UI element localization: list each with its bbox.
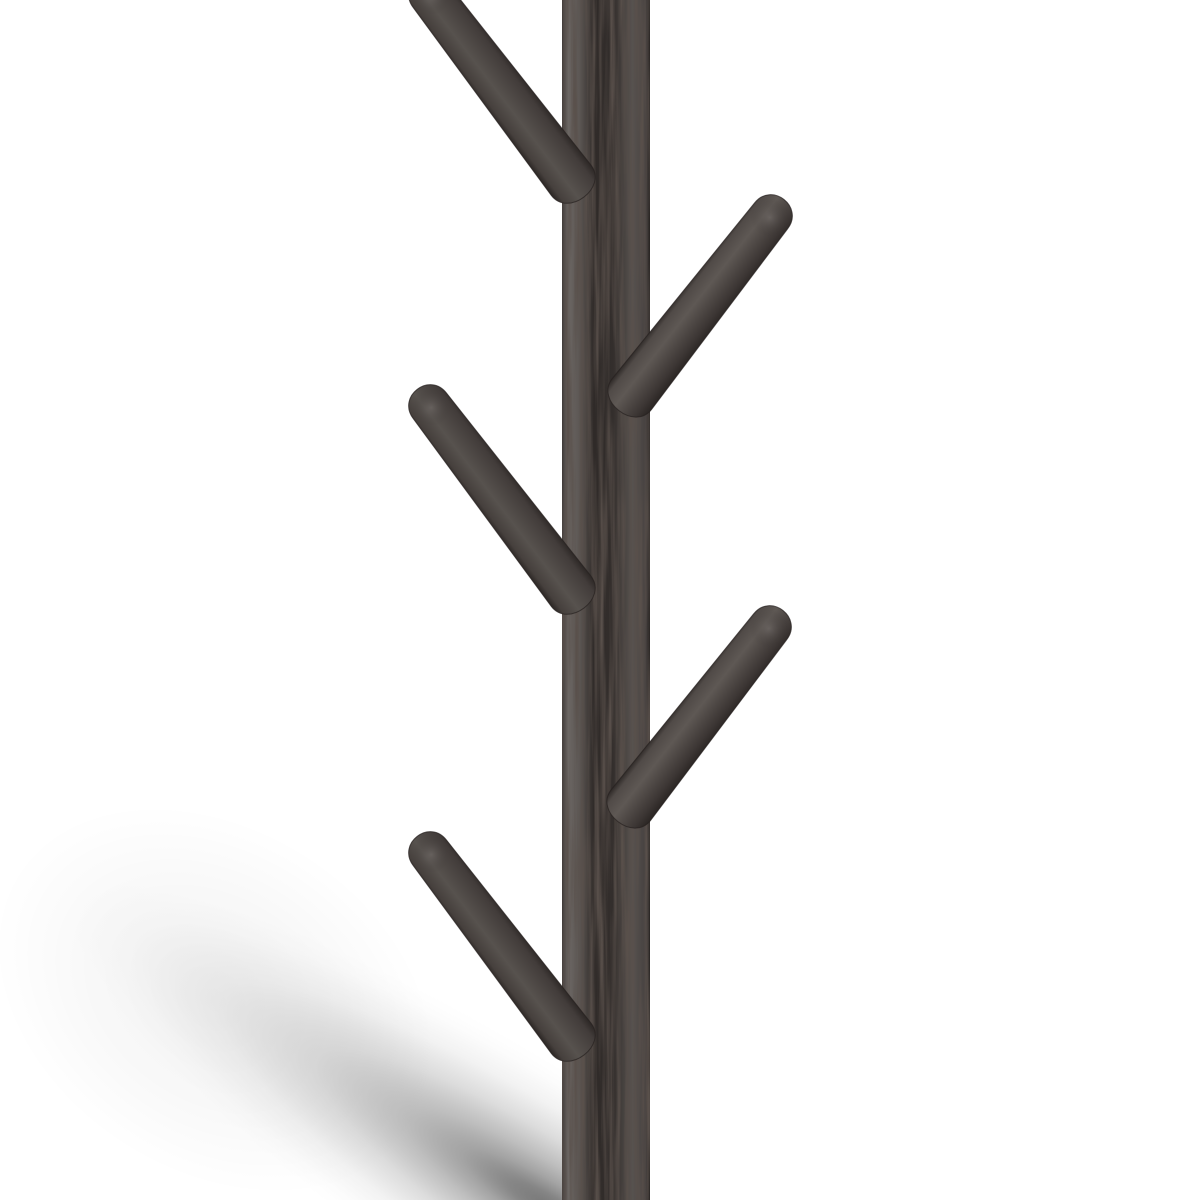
peg: upper right <box>599 184 804 426</box>
peg: lower right <box>598 595 803 837</box>
peg: middle left <box>397 374 604 623</box>
floor shadow <box>0 760 600 1200</box>
peg: top left <box>397 0 604 212</box>
pole <box>562 0 650 1200</box>
coat rack product image <box>90 0 793 1200</box>
peg: bottom left <box>397 821 604 1070</box>
